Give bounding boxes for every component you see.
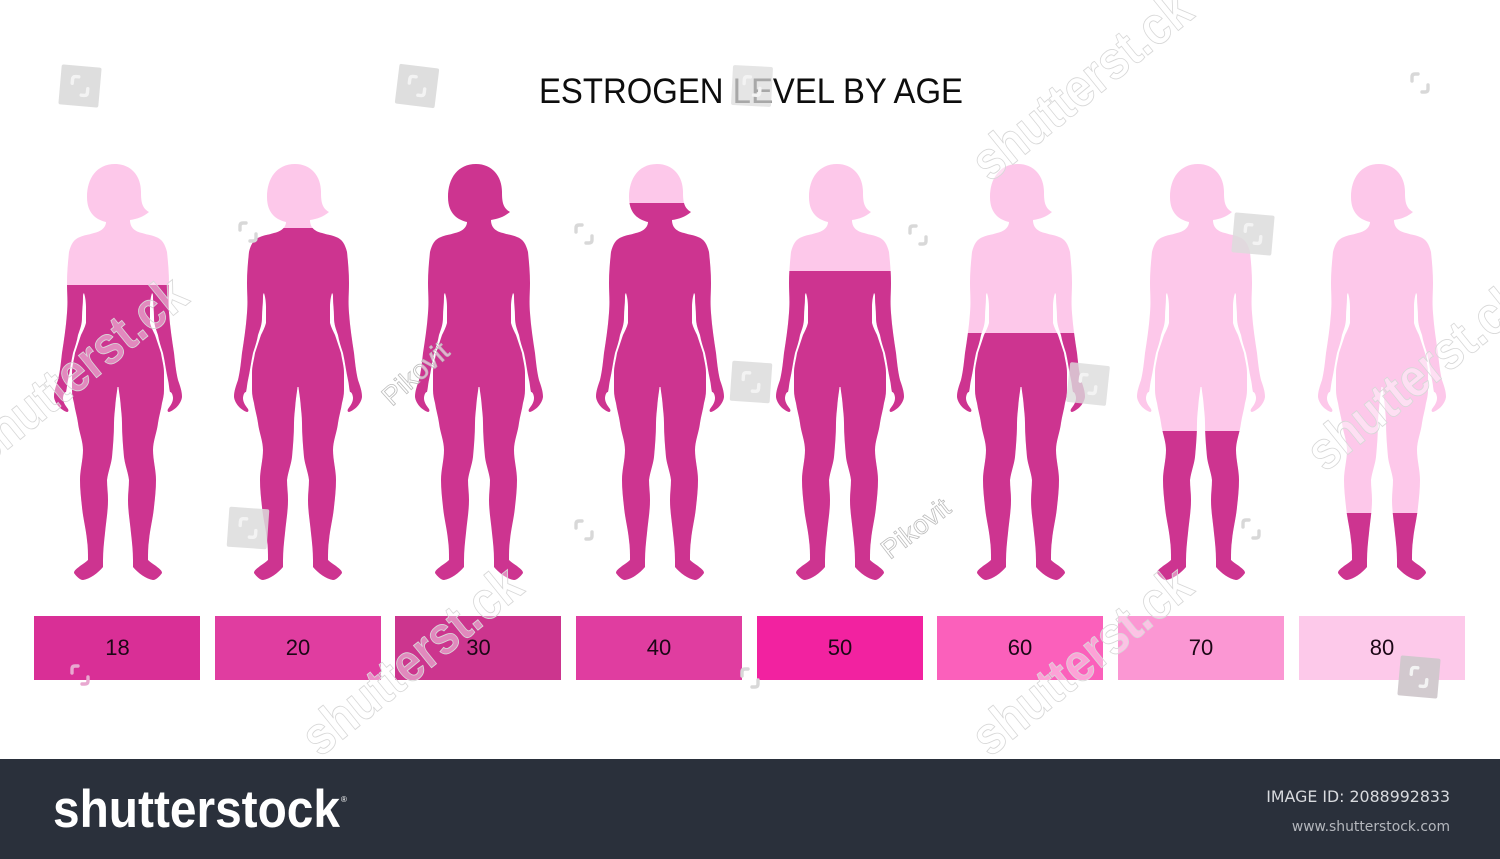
age bar: 18 [34, 616, 200, 680]
age bar: 60: 60 [1008, 635, 1032, 660]
age bar: 40: 40 [647, 635, 671, 660]
watermark text layer: shutterst.ck [290, 553, 534, 767]
age bar: 50: 50 [828, 635, 852, 660]
age bar: 50 [757, 616, 923, 680]
age bar: 18: 18 [105, 635, 130, 660]
age bar: 20 [215, 616, 381, 680]
age bar: 30 [395, 616, 561, 680]
watermark badges [58, 64, 1441, 699]
footer logo: shutterstock [53, 780, 340, 839]
watermark text layer: Pikovit [875, 492, 957, 565]
age bar: 70 [1118, 616, 1284, 680]
footer bar [0, 759, 1500, 859]
registered mark: ® [341, 795, 347, 804]
title: ESTROGEN LEVEL BY AGE [539, 72, 963, 111]
site url: www.shutterstock.com [1292, 819, 1450, 835]
watermark text layer: shutterst.ck [960, 553, 1204, 767]
figure: age 70 silhouette [1137, 164, 1265, 580]
figure: age 40 silhouette [596, 164, 724, 580]
age bar: 40 [576, 616, 742, 680]
figure: age 60 silhouette [957, 164, 1085, 580]
figure: age 20 silhouette [234, 164, 362, 580]
age bar: 30: 30 [466, 635, 491, 660]
figure: age 30 silhouette [415, 164, 543, 580]
image id: IMAGE ID: 2088992833 [1266, 787, 1450, 806]
age bar: 80 [1299, 616, 1465, 680]
figure: age 18 silhouette [54, 164, 182, 580]
figure: age 50 silhouette [776, 164, 904, 580]
age bar: 70: 70 [1189, 635, 1213, 660]
watermark text layer: Pikovit [376, 336, 455, 411]
figure: age 80 silhouette [1318, 164, 1446, 580]
age bar: 20: 20 [286, 635, 310, 660]
age bar: 80: 80 [1370, 635, 1394, 660]
age bar: 60 [937, 616, 1103, 680]
